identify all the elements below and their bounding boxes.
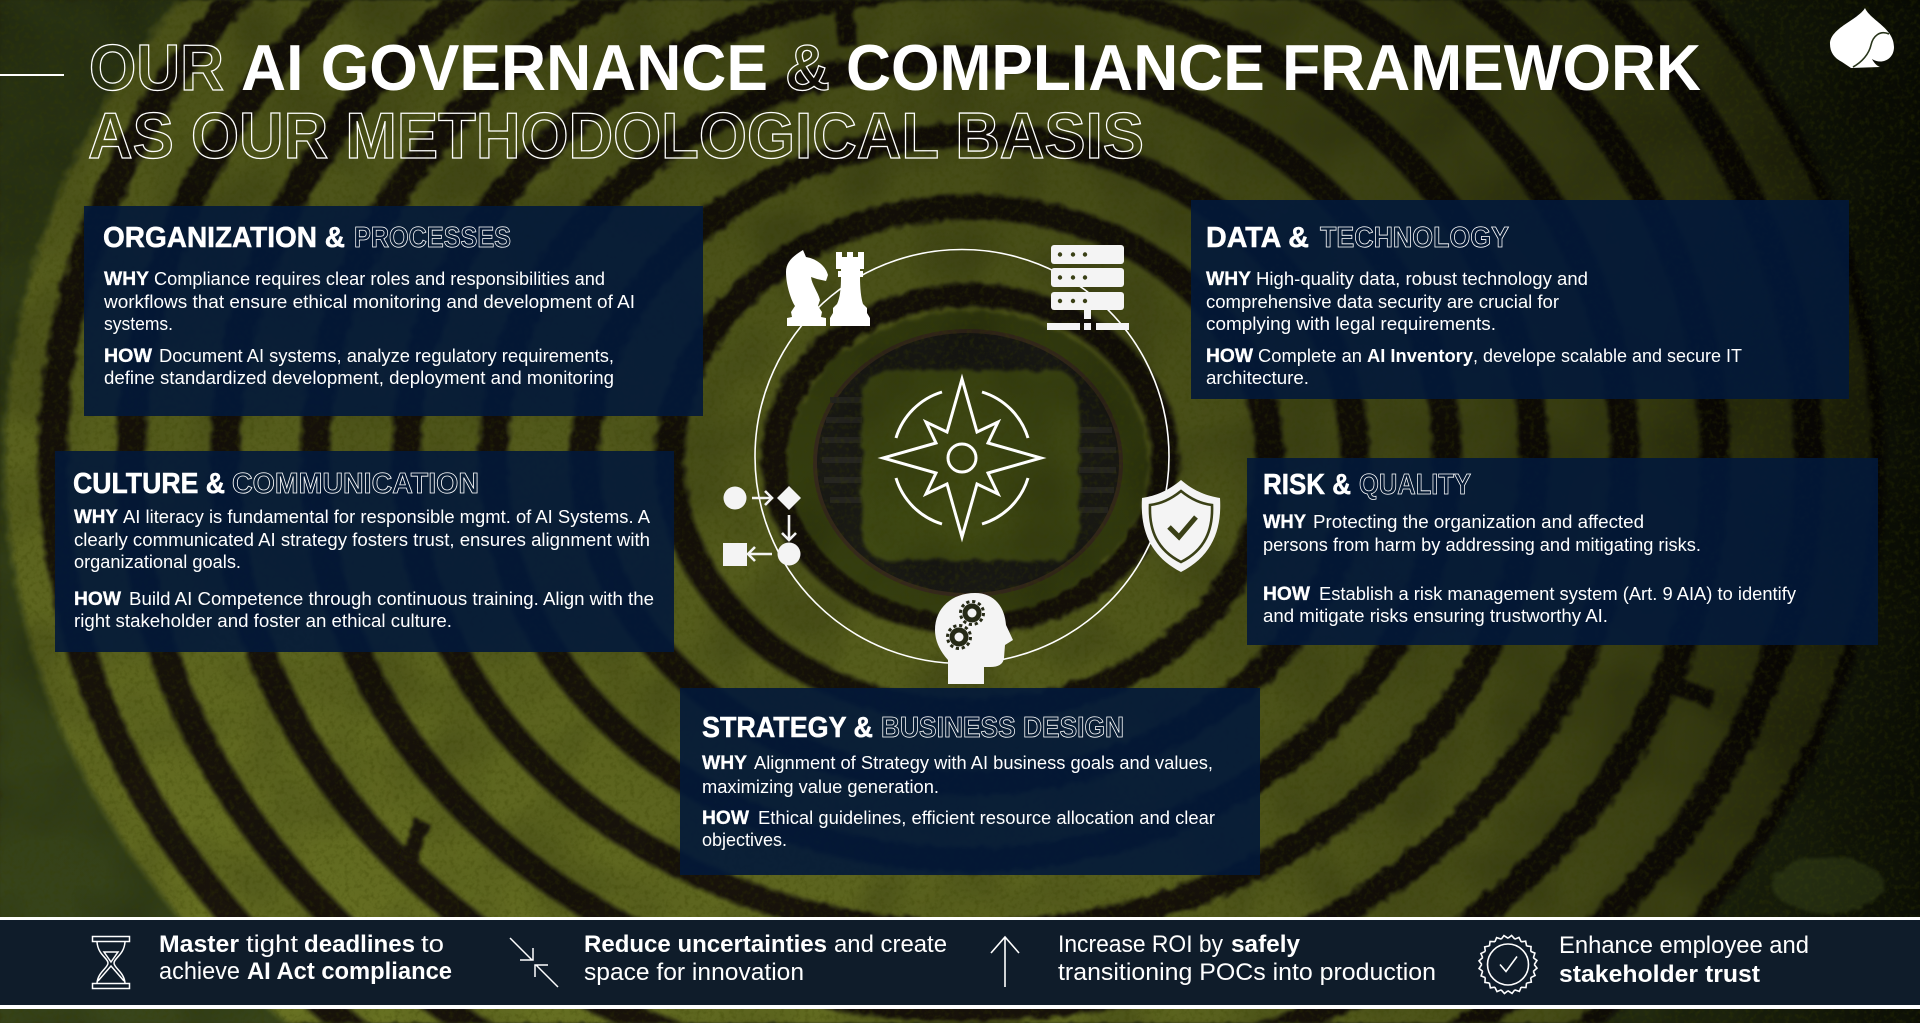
how text (104, 345, 614, 388)
why text: WHY (74, 507, 118, 528)
how text: Document AI systems, analyze regulatory requirements, (159, 345, 614, 366)
how text: Establish a risk management system (Art. 9 AIA) to identify (1319, 583, 1797, 604)
benefit: deadlines: tight (246, 931, 298, 958)
panel: risk and quality (1247, 458, 1878, 645)
title: & (785, 31, 830, 104)
benefit: deadlines: AI Act compliance (247, 958, 452, 985)
how text: HOW (1206, 346, 1253, 367)
heading: BUSINESS DESIGN (881, 712, 1124, 744)
benefit: deadlines: achieve (159, 958, 240, 985)
heading: DATA & (1206, 222, 1309, 254)
why text (103, 268, 635, 334)
why text: Compliance requires clear roles and responsibilities and (154, 268, 605, 289)
title: COMPLIANCE FRAMEWORK (846, 31, 1701, 104)
benefit: trust (1478, 932, 1809, 994)
how text: HOW (702, 808, 749, 829)
why text: comprehensive data security are crucial for (1206, 291, 1559, 312)
heading: RISK & (1263, 469, 1351, 501)
heading: PROCESSES (354, 222, 511, 254)
why text: workflows that ensure ethical monitoring and development of AI (103, 291, 635, 312)
how text: objectives. (702, 829, 787, 850)
heading (1263, 469, 1471, 501)
benefit: uncertainties: and create (834, 931, 947, 958)
why text (1263, 511, 1701, 555)
heading (702, 712, 1124, 744)
how text: define standardized development, deployment and monitoring (104, 367, 614, 388)
heading (103, 222, 511, 254)
panel: organization and processes (84, 206, 703, 416)
benefit: ROI (991, 931, 1436, 987)
why text: systems. (104, 313, 173, 334)
why text: WHY (1206, 269, 1251, 290)
how text (74, 588, 654, 631)
heading (1206, 222, 1509, 254)
how text: Build AI Competence through continuous training. Align with the (129, 588, 654, 609)
heading: COMMUNICATION (232, 468, 479, 500)
benefit: uncertainties: Reduce uncertainties (584, 931, 827, 958)
why text: persons from harm by addressing and mitigating risks. (1263, 534, 1701, 555)
why text: High-quality data, robust technology and (1256, 268, 1588, 289)
icon: compass rose (883, 379, 1041, 537)
icon: hourglass (92, 936, 130, 988)
why text: WHY (1263, 512, 1306, 533)
how text: HOW (74, 589, 121, 610)
benefit: deadlines: Master (159, 931, 239, 958)
benefit: deadlines: deadlines (304, 931, 415, 958)
maze centre: hedge ring, fence, paths and square hedge (788, 311, 1148, 615)
heading: QUALITY (1359, 469, 1471, 501)
icon: logo spade (1830, 8, 1894, 68)
central diagram: ring of five pillars around compass (723, 245, 1220, 684)
how text: AI Inventory (1367, 345, 1474, 366)
icon: process flow (723, 486, 801, 566)
why text: maximizing value generation. (702, 776, 939, 797)
how text: right stakeholder and foster an ethical culture. (74, 610, 452, 631)
why text: WHY (104, 269, 149, 290)
heading: TECHNOLOGY (1320, 222, 1509, 254)
why text (74, 506, 651, 572)
panel: strategy and business design (680, 688, 1260, 875)
title (88, 31, 1701, 172)
why text: AI literacy is fundamental for responsible mgmt. of AI Systems. A (123, 506, 651, 527)
how text: and mitigate risks ensuring trustworthy AI. (1263, 605, 1608, 626)
benefit: uncertainties (510, 931, 947, 987)
bottom benefits band (0, 917, 1920, 1009)
how text: HOW (104, 346, 152, 367)
panel: culture and communication (55, 451, 674, 652)
panel: data and technology (1191, 200, 1849, 399)
icon: chess knight and rook (786, 250, 870, 326)
icon: head with gears (935, 593, 1013, 684)
how text: Complete an (1258, 345, 1362, 366)
how text: Ethical guidelines, efficient resource allocation and clear (758, 807, 1215, 828)
heading: STRATEGY & (702, 712, 873, 744)
why text (702, 752, 1213, 797)
why text: Protecting the organization and affected (1313, 511, 1644, 532)
benefit: ROI: safely (1231, 931, 1300, 958)
ring (755, 250, 1169, 664)
why text (1206, 268, 1588, 334)
benefit: ROI: Increase ROI by (1058, 931, 1224, 958)
benefit: trust: stakeholder trust (1559, 961, 1760, 988)
how text: , develope scalable and secure IT (1473, 345, 1742, 366)
icon: shield with check (1142, 480, 1220, 572)
heading: ORGANIZATION & (103, 222, 345, 254)
benefit: trust: Enhance employee and (1559, 932, 1809, 959)
how text: HOW (1263, 584, 1310, 605)
heading (73, 468, 479, 500)
title: OUR (89, 31, 224, 104)
how text: architecture. (1206, 367, 1309, 388)
why text: complying with legal requirements. (1206, 313, 1496, 334)
why text: clearly communicated AI strategy fosters trust, ensures alignment with (74, 529, 650, 550)
why text: Alignment of Strategy with AI business goals and values, (754, 752, 1213, 773)
heading: CULTURE & (73, 468, 225, 500)
benefit: ROI: transitioning POCs into production (1058, 959, 1436, 986)
title: AS OUR METHODOLOGICAL BASIS (88, 99, 1144, 172)
how text (1206, 345, 1742, 388)
benefit: uncertainties: space for innovation (584, 959, 804, 986)
how text (1263, 583, 1797, 626)
icon: seal with check (1478, 935, 1538, 994)
how text (702, 807, 1215, 850)
why text: WHY (702, 753, 747, 774)
benefit: deadlines: to (421, 931, 444, 958)
icon: up arrow (991, 937, 1019, 987)
why text: organizational goals. (74, 551, 241, 572)
icon: server with network (1047, 245, 1129, 330)
icon: converging arrows (510, 938, 558, 987)
benefit: deadlines (92, 931, 452, 988)
title: AI GOVERNANCE (241, 31, 768, 104)
decorative rule left of title (0, 74, 64, 76)
